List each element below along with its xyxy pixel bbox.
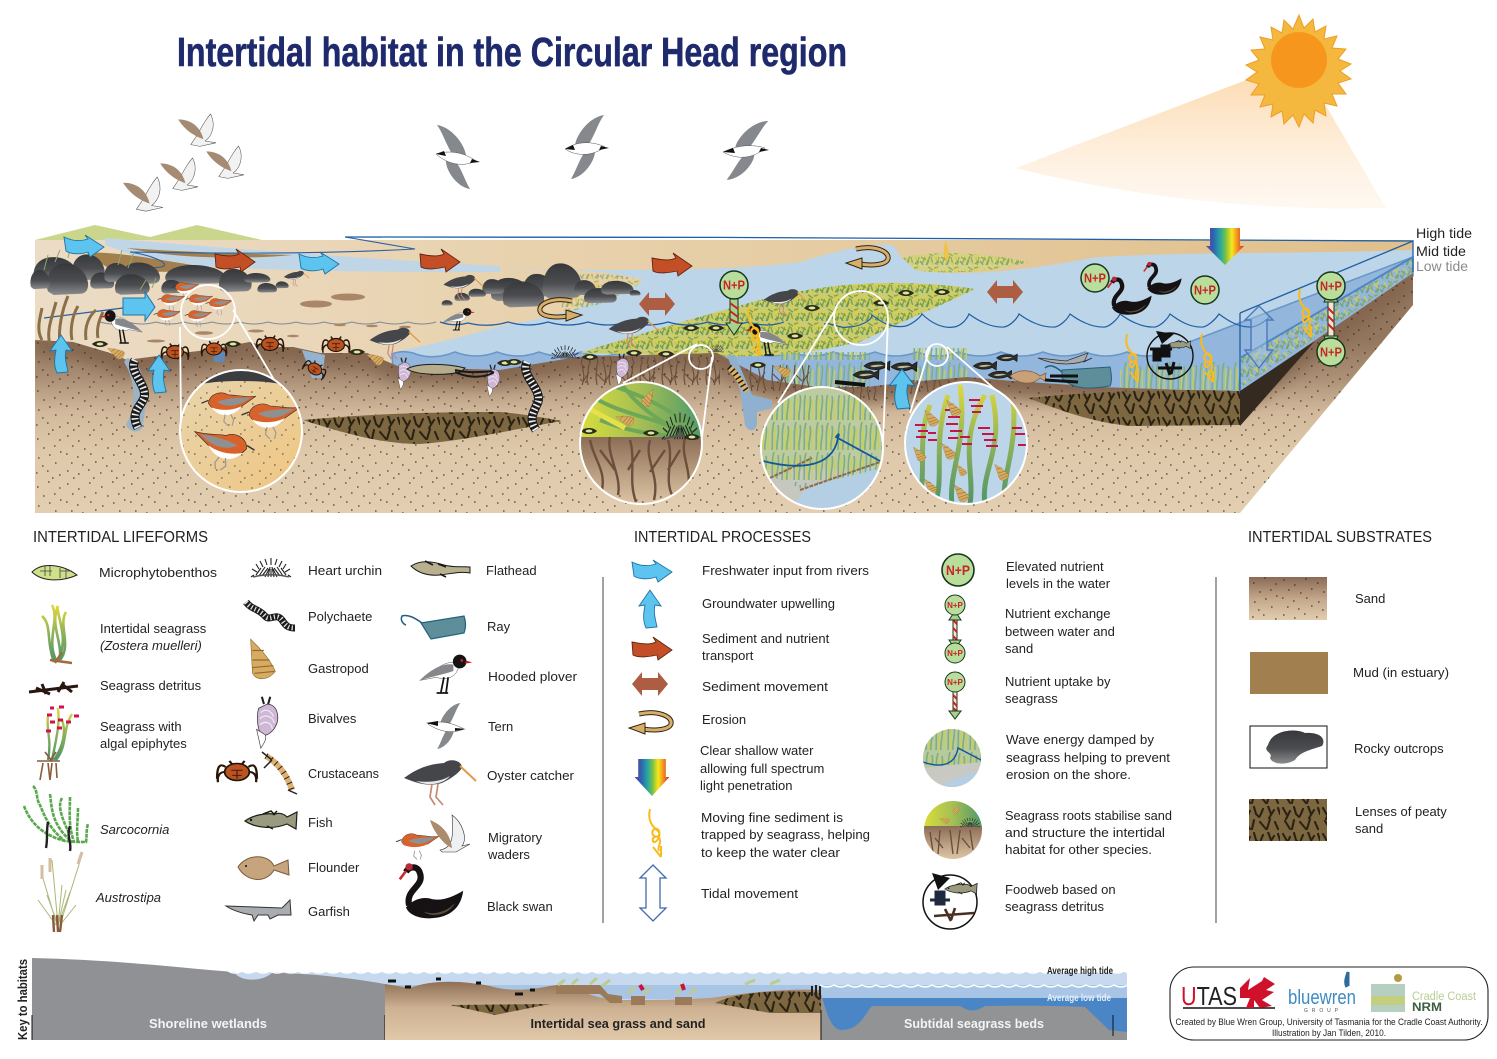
crabs: [161, 336, 350, 380]
nutrient exchange: [945, 595, 1115, 663]
ray: [1045, 366, 1112, 388]
migratory waders on shore: [154, 282, 233, 327]
intertidal sea grass and sand: [385, 978, 821, 1040]
garfish: [1038, 353, 1092, 364]
seagrass with algal epiphytes: Seagrass with: [100, 719, 182, 734]
austrostipa: Austrostipa: [95, 890, 161, 905]
key label: Key to habitats: [15, 959, 30, 1040]
bivalves: Bivalves: [308, 711, 357, 726]
hills: [35, 225, 262, 240]
sun with light beam: [1016, 15, 1386, 209]
freshwater input: [632, 560, 870, 582]
shrimp: [729, 367, 747, 391]
flying terns: [436, 115, 769, 189]
seagrass roots stabilise: and structure the intertidal: [1005, 825, 1165, 840]
nutrient uptake: Nutrient uptake by: [1005, 674, 1111, 689]
elevated nutrient: Elevated nutrient: [1006, 559, 1104, 574]
flounder: Flounder: [308, 860, 360, 875]
migratory waders: Migratory: [488, 830, 543, 845]
migratory waders: [396, 815, 543, 862]
nutrient markers in scene: N+P: [1320, 344, 1342, 360]
credit text: [1176, 1017, 1482, 1038]
mud swatch: Mud (in estuary): [1353, 665, 1449, 680]
hooded plover: [420, 655, 578, 693]
nutrient exchange: between water and: [1005, 624, 1115, 639]
sediment bed: [35, 273, 1413, 513]
intertidal seagrass: [42, 605, 207, 663]
shoreline wetlands: Shoreline wetlands: [149, 1016, 267, 1031]
credit text: Illustration by Jan Tilden, 2010.: [1272, 1028, 1386, 1038]
flathead: [407, 364, 493, 377]
seagrass roots: [580, 357, 955, 400]
tern: [426, 703, 513, 749]
flounder: [238, 857, 360, 879]
magnifier: algal epiphytes: [905, 382, 1027, 505]
seagrass roots stabilise: habitat for other species.: [1005, 842, 1152, 857]
tide wave lines: [228, 971, 1194, 987]
wave energy damped: erosion on the shore.: [1006, 767, 1131, 782]
nutrient exchange: N+P: [947, 601, 964, 610]
sarcocornia: [24, 786, 169, 851]
polychaete: Polychaete: [308, 609, 372, 624]
rocks left: [30, 254, 289, 295]
nutrient uptake: N+P: [947, 678, 964, 687]
flounder: [1010, 371, 1046, 383]
nutrient exchange: Nutrient exchange: [1005, 606, 1111, 621]
upper seagrass island: [903, 253, 1028, 272]
foodweb: seagrass detritus: [1005, 899, 1104, 914]
tide labels: Mid tide: [1416, 243, 1466, 259]
microphytobenthos: Microphytobenthos: [99, 565, 218, 580]
foodweb symbol in scene: [1147, 331, 1193, 379]
black swans: [1108, 262, 1182, 315]
sediment movement: Sediment movement: [702, 679, 828, 694]
shore plants and sarcocornia: [39, 240, 156, 345]
panel: intertidal scene: [30, 237, 1413, 513]
heading: INTERTIDAL PROCESSES: [634, 529, 811, 546]
heart urchins: [551, 345, 724, 359]
oyster catcher: [404, 760, 575, 805]
peat lens left: [303, 412, 562, 444]
clear shallow water: Clear shallow water: [700, 743, 814, 758]
river and mud channel: [87, 238, 500, 272]
seagrass detritus: Seagrass detritus: [100, 678, 202, 693]
low tide water: [392, 257, 1413, 395]
intertidal seagrass: Intertidal seagrass: [100, 621, 207, 636]
nutrient markers in scene: N+P: [1320, 278, 1342, 294]
title: Intertidal habitat in the Circular Head region: [177, 29, 847, 75]
black swan: [400, 863, 553, 918]
wave energy damped: Wave energy damped by: [1006, 732, 1155, 747]
wave energy damped: [923, 729, 1170, 787]
nutrient uptake: seagrass: [1005, 691, 1058, 706]
fine sediment trapped: Moving fine sediment is: [701, 810, 844, 825]
flathead: Flathead: [486, 563, 537, 578]
microphytobenthos on sediment: [92, 289, 950, 368]
crustaceans: Crustaceans: [308, 766, 379, 781]
bluewren logo: [1288, 972, 1356, 1014]
tide labels: Low tide: [1416, 258, 1468, 274]
bivalves: [257, 697, 357, 748]
elevated nutrient: [942, 554, 1111, 591]
heading: INTERTIDAL SUBSTRATES: [1248, 529, 1432, 546]
peat lens right: [1028, 341, 1315, 426]
fine sediment trapped: to keep the water clear: [701, 845, 841, 860]
garfish: [226, 900, 350, 921]
foodweb: [923, 873, 1116, 929]
bluewren logo: bluewren: [1288, 987, 1356, 1009]
seagrass roots stabilise: [924, 801, 1172, 859]
gastropod: [251, 639, 369, 679]
key water bands: [228, 972, 1127, 1040]
panel: intertidal processes: [603, 529, 1172, 929]
microphytobenthos: [32, 565, 218, 580]
clear shallow water: light penetration: [700, 778, 793, 793]
scene arrows and process markers: [50, 228, 1311, 409]
erosion: [629, 712, 746, 734]
sediment movement: [632, 672, 828, 696]
panel: intertidal substrates: [1216, 529, 1449, 923]
UTAS logo: [1181, 977, 1275, 1011]
peaty sand swatch: sand: [1355, 821, 1383, 836]
intertidal seagrass: (Zostera muelleri): [100, 638, 202, 653]
intertidal sea grass and sand: Intertidal sea grass and sand: [530, 1016, 706, 1031]
migratory waders: waders: [487, 847, 530, 862]
gastropods: [108, 342, 792, 379]
submerged seagrass beds: [780, 258, 1413, 390]
nutrient markers in scene: [720, 264, 1345, 366]
polychaete: [246, 602, 372, 628]
rocks centre: [442, 263, 641, 307]
groundwater upwelling: Groundwater upwelling: [702, 596, 835, 611]
tide labels in key: [1047, 966, 1113, 1004]
tern: Tern: [488, 719, 513, 734]
wave energy damped: seagrass helping to prevent: [1006, 750, 1170, 765]
subtidal seagrass beds: [811, 985, 1127, 1040]
nutrient uptake: [945, 672, 1111, 719]
Cradle Coast NRM logo: NRM: [1412, 1000, 1442, 1014]
ray: Ray: [487, 619, 511, 634]
fine sediment trapped: [649, 809, 870, 860]
peaty sand swatch: [1249, 799, 1447, 841]
magnifier: wader birds: [180, 370, 302, 492]
freshwater input: Freshwater input from rivers: [702, 563, 870, 578]
rocky outcrops swatch: [1250, 726, 1444, 768]
heading: INTERTIDAL LIFEFORMS: [33, 529, 208, 546]
magnifier lines: [180, 285, 1007, 443]
sand ripples: [147, 294, 411, 342]
flying migratory waders: [123, 114, 244, 211]
bluewren logo: GROUP: [1304, 1008, 1339, 1014]
garfish: Garfish: [308, 904, 350, 919]
nutrient markers in scene: N+P: [1084, 270, 1106, 286]
burrows: [124, 350, 772, 431]
Cradle Coast NRM logo: [1371, 974, 1477, 1014]
nutrient exchange: sand: [1005, 641, 1033, 656]
tidal movement: Tidal movement: [701, 886, 798, 901]
shoreline wetlands: [32, 958, 385, 1040]
tide lines: [44, 237, 1413, 391]
sand swatch: Sand: [1355, 591, 1385, 606]
tide labels in key: Average high tide: [1047, 966, 1113, 977]
clear shallow water: allowing full spectrum: [700, 761, 824, 776]
magnifier: wave damping by seagrass: [761, 387, 883, 509]
seagrass with algal epiphytes: algal epiphytes: [100, 736, 187, 751]
hooded plover: Hooded plover: [488, 669, 578, 684]
panel: intertidal lifeforms: [24, 529, 578, 932]
crustaceans: [217, 752, 379, 794]
fish: Fish: [308, 815, 333, 830]
nutrient markers in scene: N+P: [723, 278, 745, 292]
fish: [245, 811, 333, 830]
water body: [390, 245, 1413, 392]
sand patch seagrass near rocks: [560, 274, 643, 312]
panel: key to habitats: [15, 958, 1194, 1040]
tide labels: [1416, 225, 1472, 274]
back sand plain: [35, 240, 1413, 392]
sand swatch: [1249, 577, 1385, 620]
heart urchin: Heart urchin: [308, 563, 382, 578]
austrostipa: [38, 852, 161, 932]
ray: [401, 615, 511, 639]
clear shallow water: [635, 743, 824, 796]
groundwater upwelling: [639, 590, 835, 628]
oyster catcher: Oyster catcher: [487, 768, 575, 783]
polychaete worms: [134, 360, 538, 430]
mud swatch: [1250, 652, 1449, 694]
Cradle Coast NRM logo: Cradle Coast: [1412, 991, 1477, 1003]
oyster catchers and plovers: [100, 271, 807, 359]
seagrass peninsula: [580, 283, 975, 356]
flathead: [411, 561, 537, 578]
sediment nutrient transport: Sediment and nutrient: [702, 631, 830, 646]
heart urchin: [251, 558, 382, 578]
seagrass detritus: [29, 678, 202, 694]
nutrient markers in scene: N+P: [1194, 282, 1216, 298]
rocky outcrops swatch: Rocky outcrops: [1354, 741, 1444, 756]
gastropod: Gastropod: [308, 661, 369, 676]
sediment nutrient transport: transport: [702, 648, 754, 663]
fine sediment trapped: trapped by seagrass, helping: [701, 827, 870, 842]
nutrient exchange: N+P: [947, 649, 964, 658]
seabed detritus: [1045, 376, 1078, 382]
tide labels: High tide: [1416, 225, 1472, 241]
erosion: Erosion: [702, 712, 746, 727]
UTAS logo: UTAS: [1181, 981, 1237, 1011]
fish school: [835, 354, 1017, 385]
seagrass with algal epiphytes: [37, 707, 187, 780]
sarcocornia: Sarcocornia: [100, 822, 169, 837]
peaty sand swatch: Lenses of peaty: [1355, 804, 1447, 819]
sediment nutrient transport: [632, 631, 830, 663]
elevated nutrient: N+P: [946, 562, 970, 578]
tidal movement: [640, 865, 798, 921]
black swan: Black swan: [487, 899, 553, 914]
subtidal seagrass beds: Subtidal seagrass beds: [904, 1016, 1044, 1031]
foodweb: Foodweb based on: [1005, 882, 1116, 897]
seagrass roots stabilise: Seagrass roots stabilise sand: [1005, 808, 1172, 823]
magnifier: seagrass roots: [580, 382, 702, 505]
bivalves: [398, 354, 629, 397]
elevated nutrient: levels in the water: [1006, 576, 1111, 591]
tide labels in key: Average low tide: [1047, 993, 1111, 1004]
panel: credits and logos: [1170, 967, 1488, 1040]
